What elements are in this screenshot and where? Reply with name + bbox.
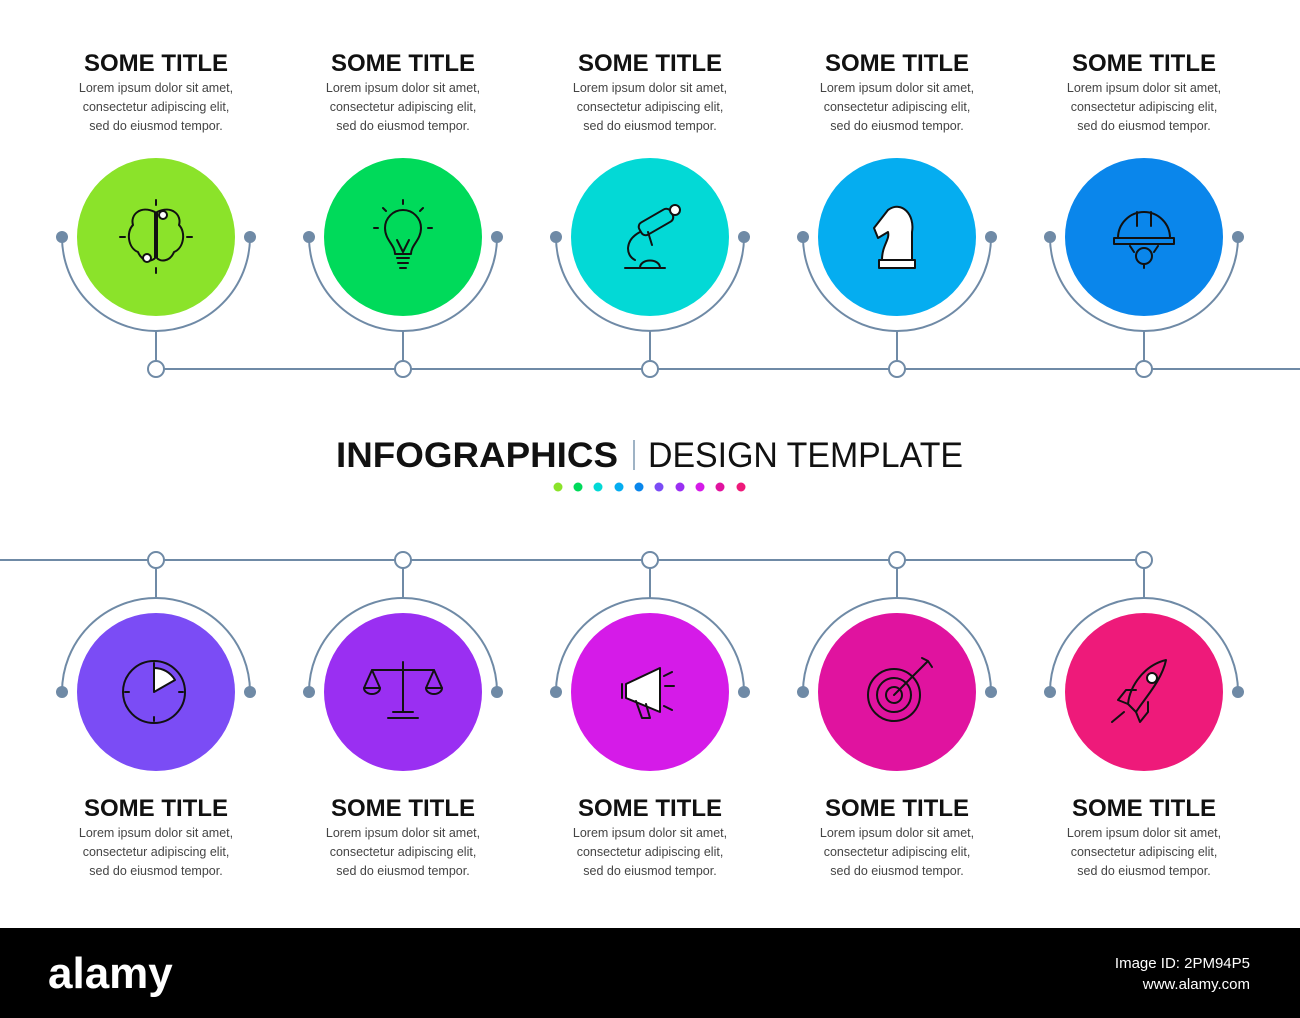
step 10: consectetur adipiscing elit, bbox=[1071, 845, 1217, 859]
step 5: consectetur adipiscing elit, bbox=[1071, 100, 1217, 114]
step 10: sed do eiusmod tempor. bbox=[1077, 864, 1211, 878]
bottom connector line bbox=[0, 559, 1136, 561]
icon: chess knight bbox=[874, 207, 915, 268]
step 7: sed do eiusmod tempor. bbox=[336, 864, 470, 878]
step 5: SOME TITLE bbox=[1072, 50, 1216, 77]
step 7: SOME TITLE bbox=[331, 795, 475, 822]
step 9: consectetur adipiscing elit, bbox=[824, 845, 970, 859]
step 3: Lorem ipsum dolor sit amet, bbox=[573, 81, 727, 95]
step 6 bbox=[56, 552, 256, 878]
step 8: consectetur adipiscing elit, bbox=[577, 845, 723, 859]
step 9: Lorem ipsum dolor sit amet, bbox=[820, 826, 974, 840]
step 8: Lorem ipsum dolor sit amet, bbox=[573, 826, 727, 840]
color dots bbox=[554, 482, 746, 492]
step 6: sed do eiusmod tempor. bbox=[89, 864, 223, 878]
title bbox=[336, 436, 963, 475]
footer watermark bar: www.alamy.com bbox=[1142, 976, 1250, 993]
step 4: SOME TITLE bbox=[825, 50, 969, 77]
footer watermark bar: Image ID: 2PM94P5 bbox=[1115, 955, 1250, 972]
icon: timer bbox=[123, 661, 185, 723]
step 9 bbox=[797, 552, 997, 878]
step 6: consectetur adipiscing elit, bbox=[83, 845, 229, 859]
step 3: consectetur adipiscing elit, bbox=[577, 100, 723, 114]
step 4: sed do eiusmod tempor. bbox=[830, 119, 964, 133]
step 4: consectetur adipiscing elit, bbox=[824, 100, 970, 114]
step 2 bbox=[303, 50, 503, 377]
step 10: SOME TITLE bbox=[1072, 795, 1216, 822]
step 7 bbox=[303, 552, 503, 878]
step 1: Lorem ipsum dolor sit amet, bbox=[79, 81, 233, 95]
top connector line bbox=[164, 368, 1300, 370]
step 2: consectetur adipiscing elit, bbox=[330, 100, 476, 114]
step 7: consectetur adipiscing elit, bbox=[330, 845, 476, 859]
footer watermark bar bbox=[0, 928, 1300, 1018]
step 10 bbox=[1044, 552, 1244, 878]
icon: rocket bbox=[1112, 660, 1166, 722]
title: DESIGN TEMPLATE bbox=[648, 436, 963, 475]
step 5: Lorem ipsum dolor sit amet, bbox=[1067, 81, 1221, 95]
icon: megaphone bbox=[622, 668, 674, 718]
icon: target bbox=[868, 658, 932, 721]
step 9: sed do eiusmod tempor. bbox=[830, 864, 964, 878]
step 3: SOME TITLE bbox=[578, 50, 722, 77]
step 9: SOME TITLE bbox=[825, 795, 969, 822]
step 8 bbox=[550, 552, 750, 878]
step 2: sed do eiusmod tempor. bbox=[336, 119, 470, 133]
step 7: Lorem ipsum dolor sit amet, bbox=[326, 826, 480, 840]
step 4 bbox=[797, 50, 997, 377]
step 2: Lorem ipsum dolor sit amet, bbox=[326, 81, 480, 95]
step 1: SOME TITLE bbox=[84, 50, 228, 77]
icon: microscope bbox=[625, 205, 680, 268]
icon: brain bbox=[120, 200, 192, 273]
title: INFOGRAPHICS bbox=[336, 436, 618, 475]
icon: helmet gear bbox=[1114, 212, 1174, 268]
icon: scales bbox=[364, 662, 442, 718]
step 1: consectetur adipiscing elit, bbox=[83, 100, 229, 114]
step 3 bbox=[550, 50, 750, 377]
step 2: SOME TITLE bbox=[331, 50, 475, 77]
step 1: sed do eiusmod tempor. bbox=[89, 119, 223, 133]
step 6: Lorem ipsum dolor sit amet, bbox=[79, 826, 233, 840]
step 4: Lorem ipsum dolor sit amet, bbox=[820, 81, 974, 95]
step 6: SOME TITLE bbox=[84, 795, 228, 822]
footer watermark bar: alamy bbox=[48, 949, 173, 998]
step 8: SOME TITLE bbox=[578, 795, 722, 822]
step 1 bbox=[56, 50, 256, 377]
step 8: sed do eiusmod tempor. bbox=[583, 864, 717, 878]
step 10: Lorem ipsum dolor sit amet, bbox=[1067, 826, 1221, 840]
step 5 bbox=[1044, 50, 1244, 377]
step 5: sed do eiusmod tempor. bbox=[1077, 119, 1211, 133]
step 3: sed do eiusmod tempor. bbox=[583, 119, 717, 133]
icon: light bulb bbox=[374, 200, 432, 268]
